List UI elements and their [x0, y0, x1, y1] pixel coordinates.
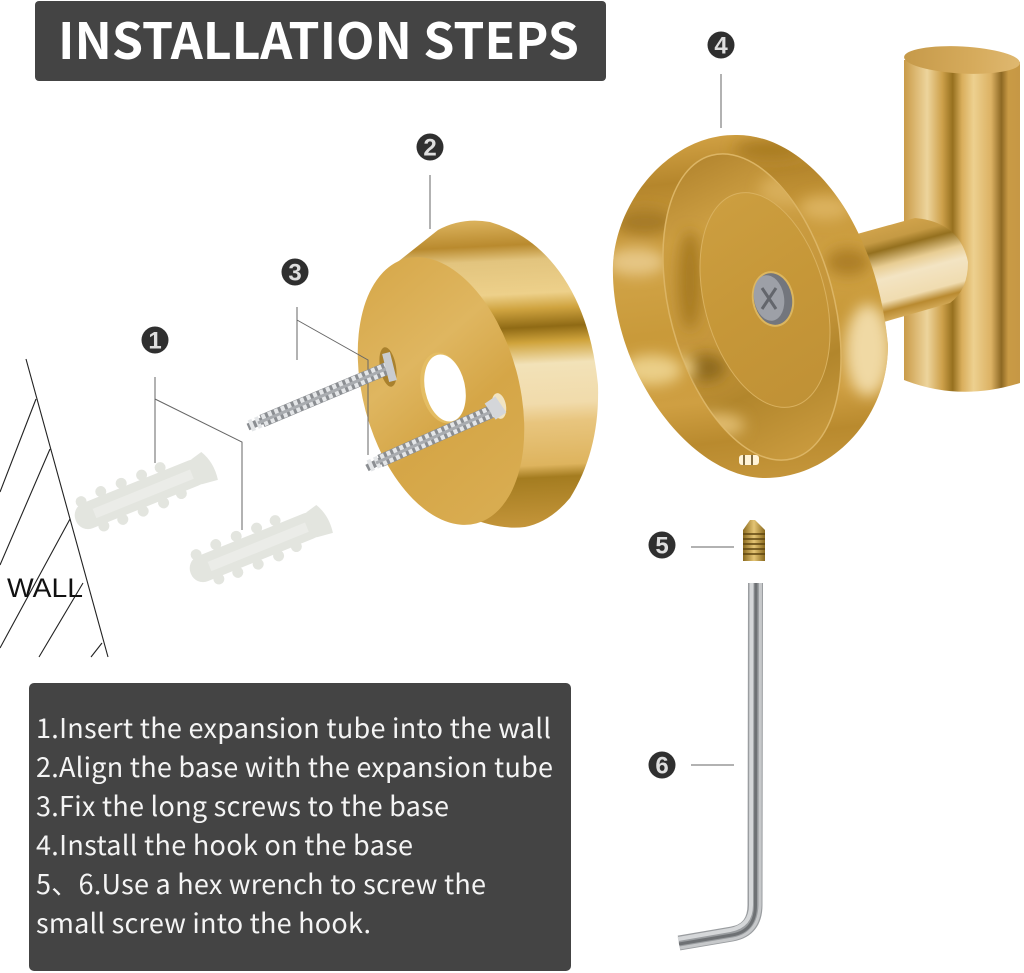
hook vertical post: [904, 60, 1020, 392]
badge 4: 4: [714, 32, 728, 60]
hook cup outer: [613, 135, 888, 478]
leader lines 1: [155, 377, 242, 530]
base front face: [330, 238, 552, 544]
hook arm: [850, 218, 968, 326]
instruction lines: small screw into the hook.: [36, 902, 371, 941]
part 1: expansion tubes: [67, 326, 336, 594]
title banner: [35, 1, 606, 81]
leader line 6: [691, 764, 734, 766]
leader lines 3: [297, 307, 368, 455]
wall illustration: [0, 359, 108, 657]
badge 2: [416, 134, 444, 162]
wall label: WALL: [7, 573, 83, 603]
instruction lines: [36, 707, 553, 941]
badge 1: [142, 326, 168, 354]
part 5: set screw: [648, 520, 765, 561]
leader line 2: [429, 175, 431, 229]
part 4: gold hook: [606, 32, 1021, 480]
expansion tube lower: [182, 497, 336, 594]
leader line 4: [720, 74, 722, 128]
screw slot lower: [490, 392, 508, 420]
expansion tube upper: [67, 444, 221, 541]
screw lower: [367, 400, 501, 468]
title text: INSTALLATION STEPS: [58, 2, 579, 74]
badge 6: 6: [655, 752, 669, 780]
hex key: [678, 583, 760, 948]
cup small slot: [739, 455, 759, 465]
centre screw: [747, 268, 799, 330]
instruction lines: 5、6.Use a hex wrench to screw the: [36, 863, 486, 902]
instruction lines: 4.Install the hook on the base: [36, 824, 413, 863]
instruction lines: 2.Align the base with the expansion tube: [36, 746, 553, 785]
badge 2: 2: [423, 134, 437, 162]
hook post top: [903, 43, 1021, 77]
instructions panel: [29, 683, 571, 971]
cup soft shading: [674, 176, 796, 440]
screw upper: [248, 353, 393, 427]
badge 4: [708, 32, 734, 60]
badge 1: 1: [148, 328, 162, 354]
hook cup plate: [678, 178, 852, 422]
leader line 5: [691, 546, 734, 548]
instruction lines: 3.Fix the long screws to the base: [36, 785, 449, 824]
badge 5: 5: [655, 532, 669, 560]
part 6: hex wrench: [648, 583, 760, 948]
base centre hole: [414, 348, 472, 428]
screw slot upper: [377, 346, 399, 388]
rim highlights: [606, 140, 890, 396]
part 3: screws: [248, 258, 508, 468]
badge 3: 3: [288, 260, 302, 286]
part 2: gold base: [330, 134, 598, 544]
badge 6: [648, 752, 676, 780]
instruction lines: 1.Insert the expansion tube into the wall: [36, 707, 551, 746]
brass set screw: [743, 520, 765, 561]
hook cup opening: [632, 134, 872, 480]
base side wall: [385, 221, 598, 528]
badge 3: [282, 258, 308, 286]
